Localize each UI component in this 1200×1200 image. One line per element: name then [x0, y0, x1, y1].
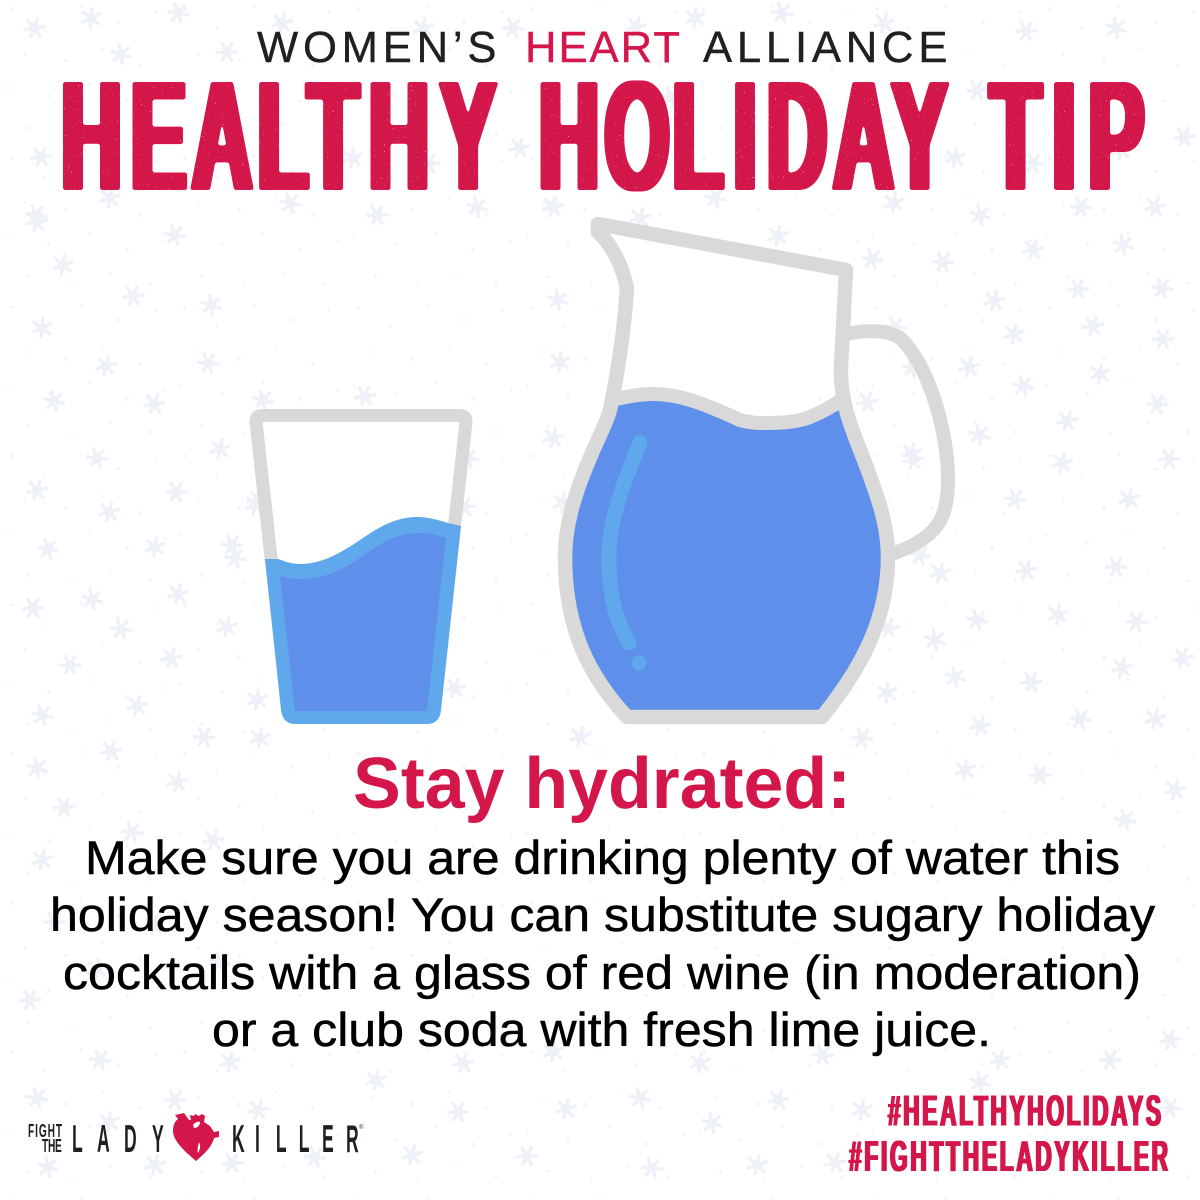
logo text: Fight the	[28, 1121, 62, 1157]
body text	[50, 831, 1156, 1056]
glass rim and walls	[256, 416, 466, 718]
glass water inner fill	[280, 533, 446, 711]
title: Healthy Holiday Tip: HEALTHY HOLIDAY TIP	[61, 48, 1144, 224]
subheading: Stay hydrated: Stay hydrated:	[353, 744, 851, 824]
pitcher outline	[565, 224, 888, 717]
pitcher highlight	[609, 443, 640, 643]
pitcher highlight dot	[632, 656, 646, 670]
body text: cocktails with a glass of red wine (in moderation)	[63, 946, 1141, 999]
pitcher neck interior	[598, 224, 846, 400]
body text: or a club soda with fresh lime juice.	[212, 1003, 991, 1056]
logo: Fight the Lady Killer	[28, 1113, 364, 1161]
heading: Women's Heart Alliance: HEART	[525, 24, 682, 72]
logo text: Fight the: THE	[42, 1136, 62, 1157]
hashtags: #HEALTHYHOLIDAYS	[888, 1088, 1161, 1136]
glass water outer band	[265, 517, 461, 724]
logo text: Killer: KILLER	[232, 1118, 359, 1161]
pitcher water	[565, 394, 888, 717]
body text: Make sure you are drinking plenty of water this	[85, 831, 1120, 884]
hashtags: #FIGHTTHELADYKILLER	[849, 1133, 1168, 1181]
icon: anatomical heart	[173, 1113, 219, 1161]
icon: water pitcher	[565, 224, 948, 717]
hashtags	[849, 1088, 1168, 1181]
heading: Women's Heart Alliance: ALLIANCE	[703, 24, 952, 72]
body text: holiday season! You can substitute sugary holiday	[50, 888, 1156, 941]
pitcher water line	[612, 394, 841, 423]
logo text: Lady: LADY	[72, 1118, 164, 1161]
pitcher handle	[846, 331, 948, 554]
registered mark: ®	[359, 1124, 364, 1131]
heading: Women's Heart Alliance: WOMEN’S	[257, 24, 501, 72]
icon: glass of water	[256, 416, 466, 724]
heart highlight	[193, 1122, 200, 1153]
logo text: Fight the: FIGHT	[28, 1121, 62, 1142]
